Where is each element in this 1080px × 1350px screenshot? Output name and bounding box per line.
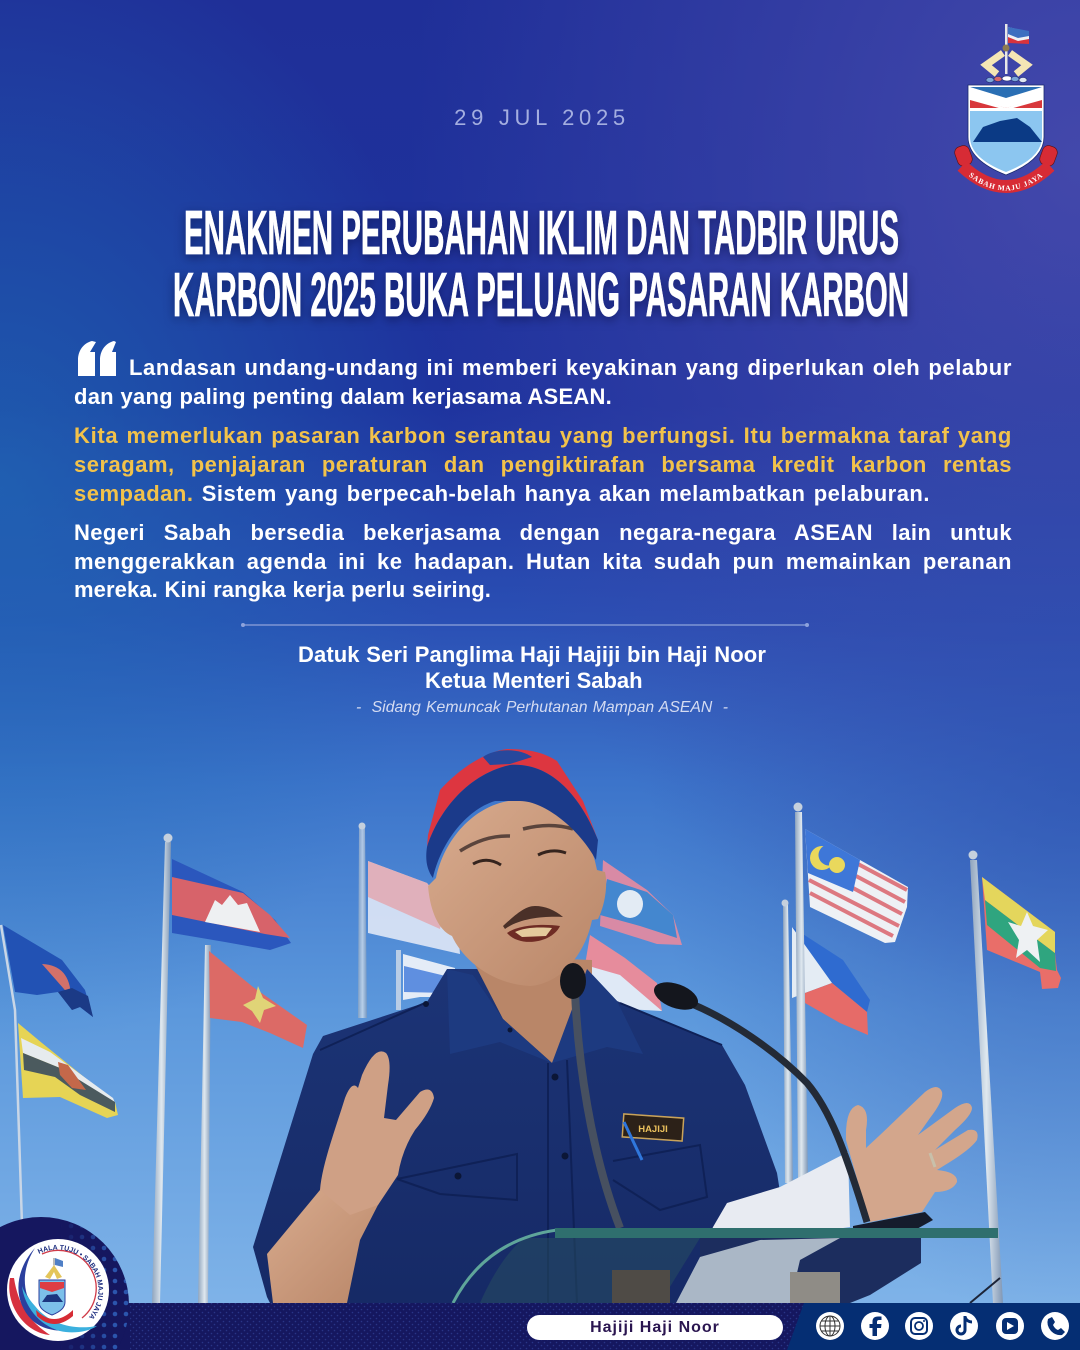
- flagpole and flag: Malaysia: [794, 802, 908, 1180]
- paragraph 3: mereka. Kini rangka kerja perlu seiring.: [74, 577, 491, 602]
- flag: Laos: [600, 860, 682, 945]
- speaker name: Datuk Seri Panglima Haji Hajiji bin Haji Noor: [298, 642, 766, 667]
- icon: website: [816, 1312, 844, 1340]
- flagpole and flag: Indonesia: [358, 822, 460, 1018]
- paragraph 2 highlighted: Kita memerlukan pasaran karbon serantau yang berfungsi. Itu bermakna taraf yang: [74, 423, 1012, 448]
- date: 29 JUL 2025: [454, 105, 630, 130]
- icon: phone: [1041, 1312, 1069, 1340]
- flag: Brunei: [18, 1023, 118, 1118]
- mountain: [973, 118, 1042, 142]
- ribbon scroll: SABAH MAJU JAYA: [969, 172, 1043, 191]
- crest flag: [1008, 27, 1029, 44]
- icon: youtube: [996, 1312, 1024, 1340]
- microphone 1: [560, 963, 620, 1228]
- handle pill: [527, 1315, 783, 1340]
- paragraph 1: [74, 355, 1012, 409]
- podium: [453, 1212, 1000, 1303]
- circular badge logo: HALA TUJU • SABAH MAJU JAYA: [38, 1244, 104, 1319]
- handle pill: Hajiji Haji Noor: [590, 1319, 720, 1336]
- flag: Singapore: [585, 935, 662, 1011]
- moustache and mouth: [503, 906, 563, 929]
- state crest: [954, 24, 1058, 193]
- flagpole and flag: Myanmar: [968, 850, 1061, 1303]
- shirt buttons: [423, 1001, 568, 1180]
- paragraph 2 highlighted: seragam, penjajaran peraturan dan pengiktirafan bersama kredit karbon rentas: [74, 452, 1012, 477]
- title: [173, 199, 909, 330]
- flags and flagpoles: [1, 802, 1061, 1303]
- speaker: [253, 749, 1000, 1303]
- quote text block: [74, 355, 1012, 602]
- icons: social row: [816, 1312, 1069, 1340]
- name tag: [622, 1114, 684, 1160]
- flagpole and flag: Cambodia: [152, 834, 291, 1303]
- attribution: [298, 642, 766, 716]
- icon: tiktok: [950, 1312, 978, 1340]
- speaker role: Ketua Menteri Sabah: [425, 668, 643, 693]
- paragraph 3: Negeri Sabah bersedia bekerjasama dengan negara-negara ASEAN lain untuk: [74, 520, 1012, 545]
- face: [428, 800, 606, 986]
- paragraph 1: Landasan undang-undang ini memberi keyakinan yang diperlukan oleh pelabur: [129, 355, 1012, 380]
- name tag: HAJIJI: [638, 1124, 668, 1135]
- paragraph 3: menggerakkan agenda ini ke hadapan. Hutan kita sudah pun memainkan peranan: [74, 549, 1012, 574]
- paragraph 2 highlighted: sempadan. Sistem yang berpecah-belah hanya akan melambatkan pelaburan.: [74, 481, 930, 506]
- flagpole: [1005, 24, 1008, 74]
- right hand: [846, 1087, 978, 1222]
- cap: [427, 749, 598, 847]
- microphone 2: [650, 977, 867, 1222]
- flag: ASEAN: [1, 925, 93, 1225]
- collar: [447, 969, 643, 1063]
- paragraph 1: dan yang paling penting dalam kerjasama ASEAN.: [74, 384, 612, 409]
- icon: quotation mark: [78, 341, 116, 376]
- arms: [986, 53, 1027, 74]
- eyes and brows: [460, 826, 573, 851]
- shirt: [253, 969, 790, 1303]
- paper: [700, 1152, 850, 1257]
- neck: [470, 955, 592, 1063]
- icon: facebook: [861, 1312, 889, 1340]
- left forearm: [267, 1190, 380, 1303]
- event: - Sidang Kemuncak Perhutanan Mampan ASEAN -: [356, 699, 728, 716]
- paragraph 3: [74, 520, 1012, 602]
- left hand: [320, 1051, 434, 1215]
- shield: [968, 85, 1044, 175]
- flagpole and flag: Vietnam: [198, 945, 307, 1303]
- beads: [986, 76, 1027, 82]
- ribbon scroll: [954, 145, 1058, 193]
- paragraph 2 highlighted: [74, 423, 1012, 506]
- circular badge logo: [0, 1217, 129, 1350]
- flagpole and flag: Philippines: [782, 900, 870, 1183]
- divider: [241, 623, 809, 627]
- icon: instagram: [905, 1312, 933, 1340]
- footer bar: [0, 1303, 1080, 1350]
- shirt pockets and seams: [320, 1002, 722, 1303]
- flag: Thailand: [396, 950, 455, 1010]
